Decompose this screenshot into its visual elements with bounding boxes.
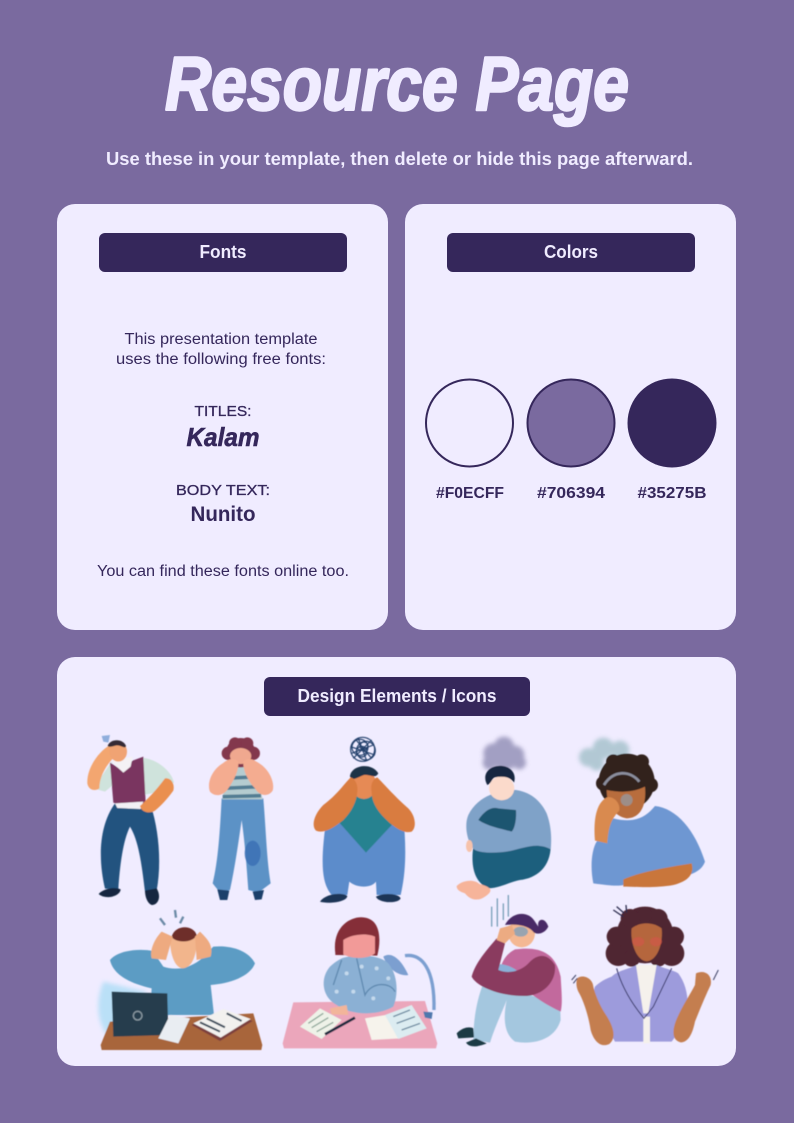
fonts intro text: This presentation template	[124, 331, 318, 348]
panel: design elements	[57, 657, 736, 1066]
subtitle: Use these in your template, then delete or hide this page afterward.	[106, 149, 693, 169]
swatch: 35275B: #35275B	[638, 485, 706, 502]
heading: fonts: Fonts	[200, 242, 246, 262]
panel: colors	[405, 204, 736, 630]
heading: colors	[447, 233, 695, 272]
heading: fonts	[99, 233, 347, 272]
titles font: TITLES:	[194, 403, 252, 420]
fonts intro text	[116, 331, 326, 368]
icon: angry woman with curly hair in blazer	[572, 905, 718, 1045]
titles font: Kalam	[186, 422, 260, 452]
heading: design elements	[264, 677, 530, 716]
icon: man pulling hair at desk with laptop	[98, 910, 262, 1050]
swatch: 706394: #706394	[537, 485, 605, 502]
body font	[176, 482, 270, 526]
icon: girl at pink desk with papers and lamp	[283, 917, 437, 1048]
swatch: F0ECFF: #F0ECFF	[436, 485, 504, 502]
title: Resource Page	[165, 42, 629, 127]
swatch: 35275B	[628, 378, 716, 502]
fonts intro text: uses the following free fonts:	[116, 351, 326, 368]
icon: man crouching with scribble above head	[314, 737, 415, 903]
heading: design elements: Design Elements / Icons	[298, 686, 496, 706]
panel: fonts	[57, 204, 388, 630]
body font: Nunito	[190, 503, 256, 526]
heading: colors: Colors	[544, 242, 598, 262]
icon: person hugging knees under cloud	[457, 737, 551, 900]
icon: woman sitting with hand on forehead	[457, 895, 562, 1046]
swatch: F0ECFF	[426, 380, 513, 502]
icon: stressed man holding head	[87, 735, 174, 905]
titles font	[186, 403, 260, 452]
icon: woman covering face	[209, 737, 273, 900]
swatch: 706394	[528, 380, 614, 502]
fonts note: You can find these fonts online too.	[97, 563, 349, 580]
body font: BODY TEXT:	[176, 482, 270, 499]
icon: woman with afro rubbing eye	[579, 738, 705, 887]
